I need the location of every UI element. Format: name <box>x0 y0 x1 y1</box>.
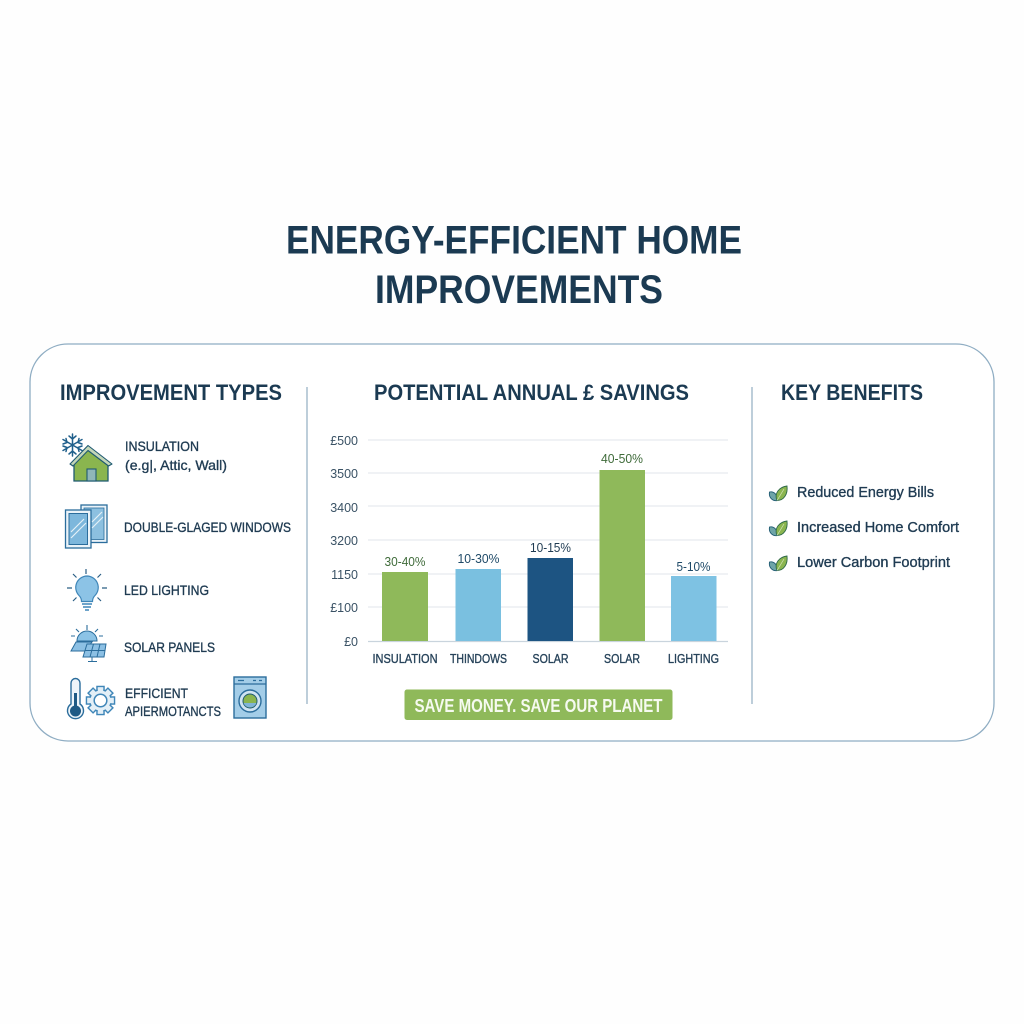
label: efficient appliances: APIERMOTANCTS <box>125 703 221 719</box>
label: LED lighting: LED LIGHTING <box>124 582 209 598</box>
icon: washing machine <box>234 677 266 718</box>
heading: key benefits: KEY BENEFITS <box>781 380 923 405</box>
icon: double-glazed windows <box>66 505 107 548</box>
y axis labels: £0 <box>344 635 358 649</box>
bar value labels: 10-30% <box>458 551 500 566</box>
panel: improvement types <box>60 380 291 719</box>
bar value labels: 30-40% <box>384 554 426 569</box>
bar value labels: 40-50% <box>601 451 643 466</box>
x axis labels <box>372 652 719 666</box>
label: insulation <box>125 438 227 473</box>
label: insulation: (e.g|, Attic, Wall) <box>125 457 227 473</box>
y axis labels <box>330 434 358 649</box>
y axis labels: £500 <box>330 434 358 448</box>
icon: LED bulb <box>67 569 107 610</box>
x axis labels: THINDOWS <box>450 652 507 666</box>
panel: savings chart <box>330 380 728 720</box>
main panel <box>30 344 994 741</box>
label: increased home comfort: Increased Home Comfort <box>797 520 959 536</box>
bar value labels: 5-10% <box>676 559 711 574</box>
y axis labels: 3200 <box>330 534 358 548</box>
panel: key benefits <box>769 380 959 571</box>
icon: thermometer <box>68 679 84 719</box>
label: solar panels: SOLAR PANELS <box>124 639 215 655</box>
x axis labels: SOLAR <box>532 652 568 666</box>
bars <box>382 470 716 641</box>
bar value labels <box>384 451 711 574</box>
icon: insulated house <box>63 434 112 481</box>
label: reduced energy bills: Reduced Energy Bills <box>797 485 934 501</box>
x axis labels: INSULATION <box>372 652 438 666</box>
icon: gear <box>86 686 114 714</box>
x axis labels: SOLAR <box>604 652 640 666</box>
icon: leaf 2 <box>769 521 787 536</box>
title: IMPROVEMENTS <box>375 268 663 312</box>
label: lower carbon footprint: Lower Carbon Footprint <box>797 555 950 571</box>
icon: leaf 1 <box>769 486 787 501</box>
bar chart <box>330 434 728 666</box>
label: efficient appliances <box>125 685 221 719</box>
x axis labels: LIGHTING <box>668 652 719 666</box>
icon: solar panels <box>71 625 106 662</box>
callout: save money: SAVE MONEY. SAVE OUR PLANET <box>414 695 663 716</box>
y axis labels: 3500 <box>330 467 358 481</box>
heading: potential annual savings: POTENTIAL ANNUAL £ SAVINGS <box>374 380 689 405</box>
label: efficient appliances: EFFICIENT <box>125 685 188 701</box>
title: ENERGY-EFFICIENT HOME <box>286 218 742 262</box>
icon: leaf 3 <box>769 556 787 571</box>
heading: improvement types: IMPROVEMENT TYPES <box>60 380 282 405</box>
label: insulation: INSULATION <box>125 438 199 454</box>
y axis labels: £100 <box>330 601 358 615</box>
callout: save money <box>404 690 672 720</box>
y axis labels: 3400 <box>330 501 358 515</box>
label: double-glazed windows: DOUBLE-GLAGED WINDOWS <box>124 519 291 535</box>
bar value labels: 10-15% <box>530 540 571 555</box>
y axis labels: 1150 <box>331 568 358 582</box>
title <box>286 218 742 312</box>
